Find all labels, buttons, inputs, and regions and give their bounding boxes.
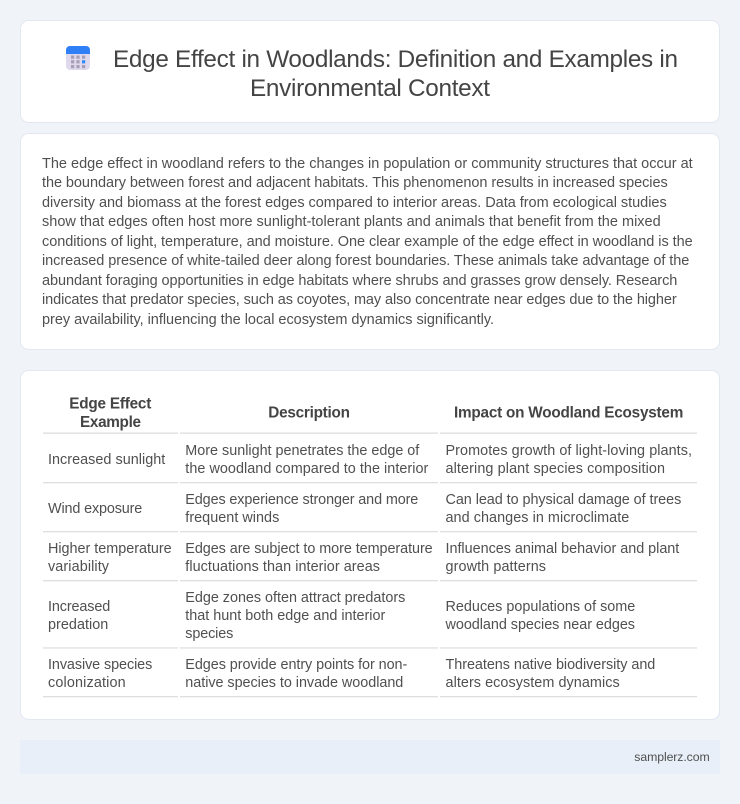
table row: wind exposure: Wind exposure (48, 501, 142, 517)
table row: increased predation: that hunt both edge and interior (185, 608, 386, 624)
table row: wind exposure: frequent winds (185, 510, 279, 526)
text block: edge effect explanation: the boundary between forest and adjacent habitats. This phenomenon results in increased species (42, 175, 668, 191)
text block: edge effect explanation (42, 156, 693, 328)
table row: higher temperature variability: fluctuations than interior areas (185, 559, 380, 575)
table row: increased sunlight: More sunlight penetrates the edge of (185, 443, 420, 459)
table row: higher temperature variability: Edges are subject to more temperature (185, 541, 433, 557)
table row: higher temperature variability: Influences animal behavior and plant (446, 541, 679, 557)
icon: calendar (66, 46, 90, 70)
table row: increased predation: Reduces populations of some (446, 599, 635, 615)
title: Environmental Context (250, 75, 490, 102)
table header row: Description (268, 404, 350, 422)
table header row: Example (80, 414, 141, 431)
table row: invasive species colonization: Invasive species (48, 657, 152, 673)
table row: higher temperature variability (43, 541, 697, 581)
table row: increased sunlight: altering plant species composition (446, 461, 665, 477)
table row: increased predation: woodland species near edges (444, 617, 635, 633)
table row: increased sunlight (43, 443, 697, 483)
table row: increased sunlight: Increased sunlight (48, 452, 165, 468)
table row: invasive species colonization: Edges provide entry points for non- (185, 657, 408, 673)
text block: edge effect explanation: indicates that predator species, such as coyotes, may also concentrate near edges due to the higher (42, 292, 677, 308)
table row: invasive species colonization: Threatens native biodiversity and (446, 657, 655, 673)
table row: wind exposure: Can lead to physical damage of trees (446, 492, 681, 508)
table row: higher temperature variability: Higher temperature (48, 541, 172, 557)
table row: increased predation: predation (48, 617, 108, 633)
table row: increased predation: Edge zones often attract predators (185, 590, 405, 606)
table row: wind exposure: and changes in microclimate (446, 510, 629, 526)
text block: edge effect explanation: The edge effect in woodland refers to the changes in population or community structures that occur at (42, 156, 693, 172)
table row: increased sunlight: the woodland compared to the interior (185, 461, 429, 477)
title: Edge Effect in Woodlands: Definition and Examples in (113, 46, 678, 73)
table row: invasive species colonization: native species to invade woodland (185, 675, 403, 691)
table header row (43, 396, 697, 434)
footer (20, 740, 720, 774)
panel: examples table (20, 370, 720, 720)
table row: wind exposure (43, 492, 697, 532)
table header row: Edge Effect (69, 396, 151, 412)
table row: invasive species colonization: alters ecosystem dynamics (446, 675, 620, 691)
table row: increased predation: Increased (48, 599, 110, 615)
text block: edge effect explanation: diversity and biomass at the forest edges compared to interior areas. Data from ecological studies (42, 195, 667, 211)
table row: invasive species colonization (43, 657, 697, 697)
title (113, 46, 678, 102)
table row: increased predation: species (185, 626, 233, 642)
table header row: Impact on Woodland Ecosystem (454, 404, 683, 422)
footer: samplerz.com (634, 750, 710, 764)
text block: edge effect explanation: increased presence of white-tailed deer along forest boundaries. These animals take advantage of the (42, 253, 689, 269)
text block: edge effect explanation: show that edges often host more sunlight-tolerant plants and animals that benefit from the mixed (42, 214, 661, 230)
table row: higher temperature variability: variability (48, 559, 110, 575)
table row: increased predation (43, 590, 697, 649)
table row: higher temperature variability: growth patterns (446, 559, 546, 575)
panel: definition text (20, 134, 720, 350)
text block: edge effect explanation: conditions of light, temperature, and moisture. One clear example of the edge effect in woodland is the (42, 234, 693, 250)
text block: edge effect explanation: prey availability, influencing the local ecosystem dynamics significantly. (42, 312, 494, 328)
table row: increased sunlight: Promotes growth of light-loving plants, (446, 443, 692, 459)
panel: title header (20, 20, 720, 122)
table row: wind exposure: Edges experience stronger and more (185, 492, 418, 508)
table row: invasive species colonization: colonization (48, 675, 126, 691)
text block: edge effect explanation: abundant foraging opportunities in edge habitats where shrubs and grasses grow densely. Research (42, 273, 677, 289)
